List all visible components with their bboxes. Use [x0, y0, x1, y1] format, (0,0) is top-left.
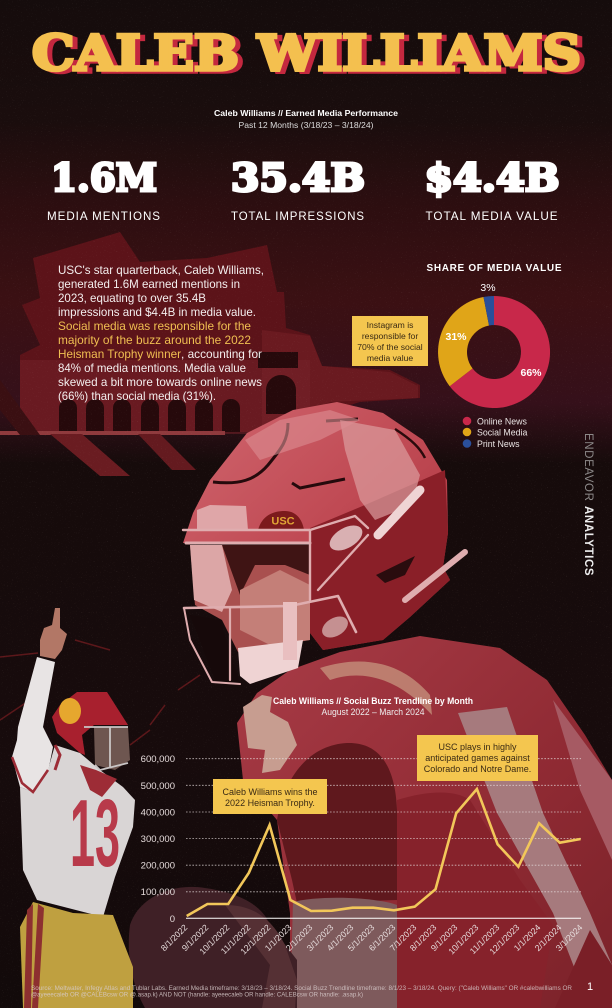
donut chart: share of media value [426, 263, 562, 408]
subtitle: Caleb Williams // Earned Media Performance [214, 108, 398, 118]
donut legend: Social Media [477, 428, 527, 438]
main player facemask [183, 490, 465, 684]
line chart: social buzz by month: 9/1/2023 [429, 922, 460, 953]
donut chart: share of media value: 31% [445, 331, 467, 343]
summary paragraph: 2023, equating to over 35.4B [58, 291, 206, 305]
subtitle: Past 12 Months (3/18/23 – 3/18/24) [238, 120, 374, 130]
stat: total media value: $4.4B [424, 155, 560, 200]
line chart: social buzz by month: 10/1/2022 [197, 922, 232, 956]
callout: Colorado and Notre Dame games: Colorado and Notre Dame. [424, 764, 531, 774]
source footnote: Source: Meltwater, Infegy Atlas and Tublar Labs. Earned Media timeframe: 3/18/23 – 3/18/24. Social Buzz Trendline timeframe: 8/1/23 – 3/18/24. Query: ("Caleb Williams" OR #calebwilliams OR [31, 985, 572, 992]
jersey and shoulders of main player [237, 636, 612, 1008]
secondary player celebrating [12, 608, 135, 1008]
line chart: social buzz by month: 8/1/2022 [159, 922, 190, 953]
callout: Instagram share: Instagram is [367, 320, 413, 330]
line chart: social buzz by month: 11/1/2023 [468, 922, 502, 956]
callout: Heisman Trophy: 2022 Heisman Trophy. [225, 798, 315, 808]
callout: Colorado and Notre Dame games: anticipated games against [425, 753, 530, 763]
source footnote [31, 985, 572, 998]
brand: Endeavor Analytics: ENDEAVOR [582, 433, 594, 502]
line chart: social buzz by month: 5/1/2023 [346, 922, 377, 953]
summary paragraph: , accounting for [181, 347, 262, 361]
line chart: social buzz by month: 400,000 [141, 808, 175, 818]
donut legend: Print News [477, 439, 520, 449]
stat: media mentions [47, 155, 161, 223]
stat: total impressions [231, 155, 365, 223]
callout: Heisman Trophy [213, 779, 327, 814]
main player face [190, 545, 310, 684]
brand: Endeavor Analytics: ANALYTICS [582, 506, 594, 576]
stat: total media value [424, 155, 560, 223]
line chart: social buzz by month: 3/1/2023 [305, 922, 336, 953]
title: CALEB WILLIAMS [32, 24, 581, 82]
stat: media mentions: MEDIA MENTIONS [47, 209, 161, 223]
line chart: social buzz by month: 12/1/2022 [238, 922, 273, 956]
callout: Instagram share [352, 316, 428, 366]
line chart: social buzz by month: 2/1/2024 [533, 922, 564, 953]
summary paragraph: (66%) than social media (31%). [58, 389, 216, 403]
summary paragraph: Social media was responsible for the [58, 319, 251, 333]
background scratches [0, 640, 200, 745]
summary paragraph: majority of the buzz around the 2022 [58, 333, 251, 347]
callout: Instagram share: media value [367, 353, 413, 363]
chart title: August 2022 – March 2024 [322, 707, 424, 717]
chart title: Caleb Williams // Social Buzz Trendline by Month [273, 696, 473, 706]
callout: Instagram share: 70% of the social [357, 342, 423, 352]
line chart: social buzz by month: 4/1/2023 [325, 922, 356, 953]
callout: Instagram share: responsible for [362, 331, 418, 341]
callout: Colorado and Notre Dame games [417, 735, 538, 781]
line chart: social buzz by month: 100,000 [141, 887, 175, 898]
line chart: social buzz by month: 1/1/2024 [512, 922, 543, 953]
line chart: social buzz by month: 200,000 [141, 860, 175, 872]
stat: media mentions: 1.6M [51, 155, 157, 200]
stat: total media value: TOTAL MEDIA VALUE [426, 209, 558, 223]
summary paragraph: USC's star quarterback, Caleb Williams, [58, 263, 264, 277]
line chart: social buzz by month: 7/1/2023 [388, 922, 419, 953]
line chart: social buzz by month: 9/1/2022 [180, 922, 211, 953]
summary paragraph: generated 1.6M earned mentions in [58, 277, 240, 291]
source footnote: @ayeeecaleb OR @CALEBcsw OR @.asap.k) AND NOT (handle: ayeeecaleb OR handle: CALEBcsw OR handle: .asap.k) [31, 992, 363, 998]
callout: Heisman Trophy: Caleb Williams wins the [222, 787, 318, 797]
summary paragraph [58, 263, 264, 403]
donut chart: share of media value: 3% [480, 282, 496, 294]
summary paragraph: 84% of media mentions. Media value [58, 361, 246, 375]
line chart: social buzz by month: 0 [170, 914, 175, 925]
stat: total impressions: TOTAL IMPRESSIONS [231, 209, 365, 223]
line chart: social buzz by month: 500,000 [141, 781, 175, 792]
line chart: social buzz by month: 8/1/2023 [408, 922, 439, 953]
line chart: social buzz by month: 600,000 [141, 754, 175, 765]
line chart: social buzz by month: 10/1/2023 [446, 922, 481, 956]
donut chart: share of media value: SHARE OF MEDIA VALUE [426, 263, 562, 274]
line chart: social buzz by month: 11/1/2022 [219, 922, 253, 956]
football and hand [129, 887, 297, 1008]
callout: Colorado and Notre Dame games: USC plays in highly [438, 742, 517, 752]
line chart: social buzz by month: 1/1/2023 [263, 922, 294, 953]
secondary player celebrating: 13 [70, 780, 120, 887]
main player helmet [183, 402, 450, 650]
brand: Endeavor Analytics [582, 433, 594, 576]
line chart: social buzz by month: 6/1/2023 [367, 922, 398, 953]
line chart: social buzz by month: 2/1/2023 [284, 922, 315, 953]
title: CALEB WILLIAMS [37, 26, 586, 84]
summary paragraph: Heisman Trophy winner [58, 347, 181, 361]
summary paragraph: impressions and $4.4B in media value. [58, 305, 256, 319]
subtitle [214, 108, 398, 130]
stadium illustration [0, 232, 420, 476]
chart title [273, 696, 473, 717]
stat: total impressions: 35.4B [231, 155, 365, 200]
page number: 1 [587, 981, 593, 993]
summary paragraph: skewed a bit more towards online news [58, 375, 262, 389]
line chart: social buzz by month: 300,000 [141, 834, 175, 845]
line chart: social buzz by month: 12/1/2023 [487, 922, 522, 956]
main player helmet: USC [271, 516, 295, 528]
line chart: social buzz by month: 3/1/2024 [554, 922, 585, 953]
donut legend [463, 416, 527, 449]
line chart: social buzz by month [141, 754, 585, 956]
donut chart: share of media value: 66% [520, 367, 542, 379]
donut legend: Online News [477, 416, 527, 426]
